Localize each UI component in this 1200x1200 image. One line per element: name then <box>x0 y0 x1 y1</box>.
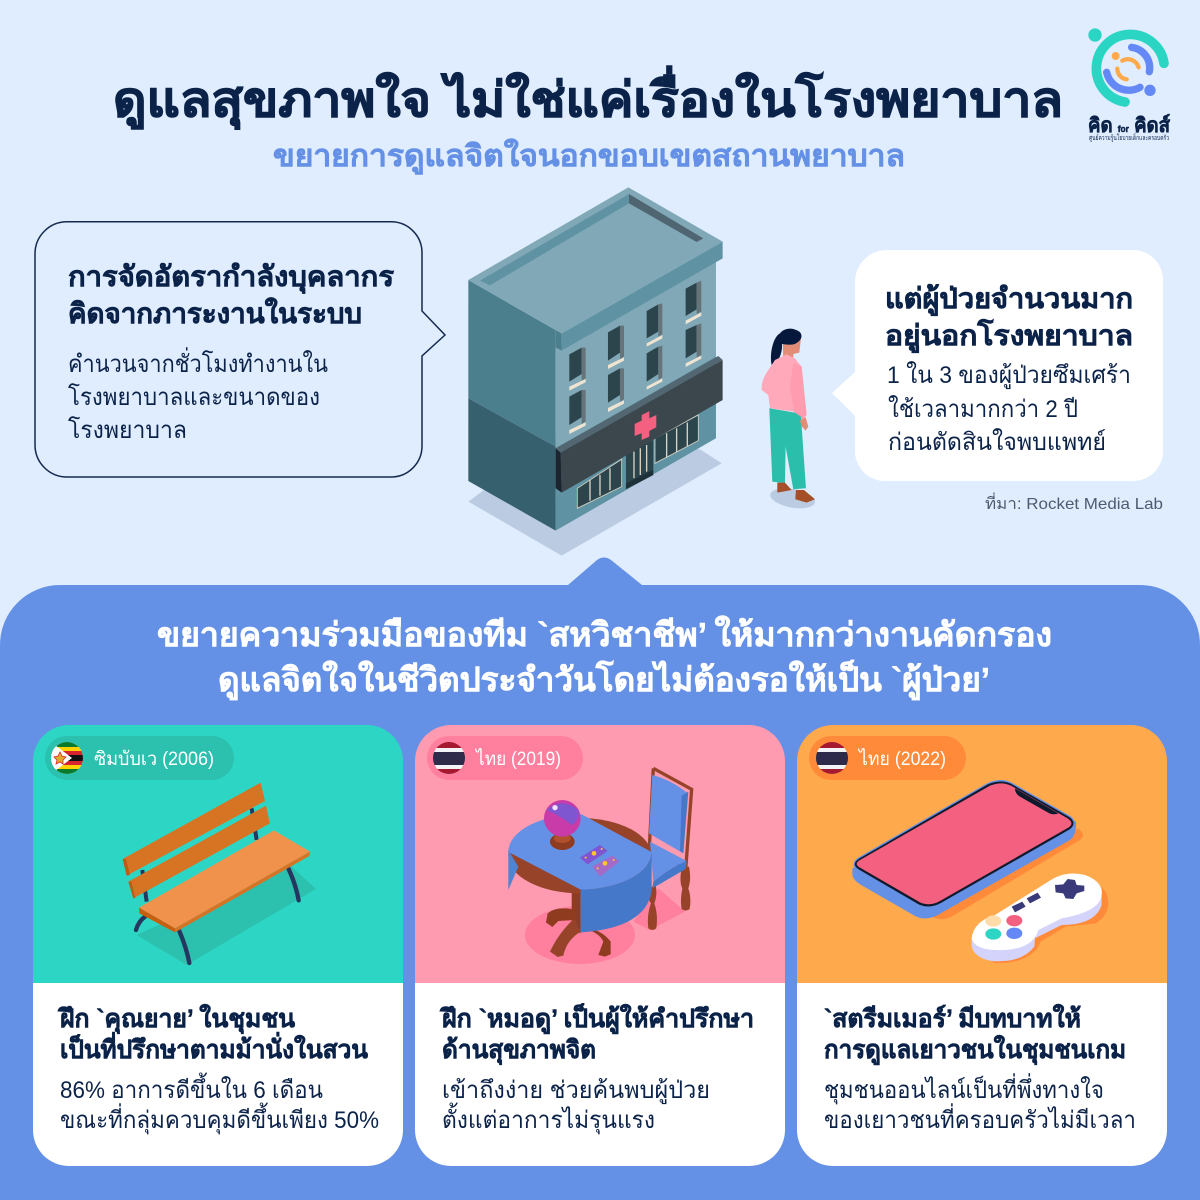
card: Thailand 2022 <box>797 725 1167 1166</box>
callout: staffing: คำนวนจากชั่วโมงทำงานใน <box>68 347 328 378</box>
callout: staffing <box>35 222 445 477</box>
card text: Zimbabwe <box>57 1003 379 1135</box>
source note: ที่มา: Rocket Media Lab <box>985 492 1163 513</box>
callout: staffing: โรงพยาบาล <box>68 416 187 444</box>
icon: smartphone and game controller <box>852 780 1108 963</box>
card: Thailand 2019 <box>415 725 785 1166</box>
panel heading: ขยายความร่วมมือของทีม `สหวิชาชีพ’ ให้มากกว่างานคัดกรอง <box>157 615 1052 653</box>
icon: woman standing <box>762 329 817 511</box>
country pill <box>809 736 966 780</box>
card text: Zimbabwe: 86% อาการดีขึ้นใน 6 เดือน <box>60 1072 323 1104</box>
card text: Thailand 2022: การดูแลเยาวชนในชุมชนเกม <box>824 1034 1126 1066</box>
country pill: ไทย (2022) <box>857 748 946 770</box>
card text: Thailand 2019: ตั้งแต่อาการไม่รุนแรง <box>442 1102 655 1135</box>
title: ดูแลสุขภาพใจ ไม่ใช่แค่เรื่องในโรงพยาบาล <box>113 65 1063 130</box>
logo <box>1088 28 1171 142</box>
country pill <box>45 736 234 780</box>
card: Zimbabwe <box>33 725 403 1166</box>
icon: Thai flag <box>433 742 465 774</box>
callout: patients outside hospital: 1 ใน 3 ของผู้ป่วยซึมเศร้า <box>887 361 1131 390</box>
card text: Zimbabwe: ขณะที่กลุ่มควบคุมดีขึ้นเพียง 50% <box>60 1102 379 1135</box>
country pill <box>427 736 583 780</box>
card text: Thailand 2019: เข้าถึงง่าย ช่วยค้นพบผู้ป่วย <box>442 1077 710 1105</box>
icon: Thai flag <box>816 742 848 774</box>
card text: Thailand 2022: ของเยาวชนที่ครอบครัวไม่มีเวลา <box>824 1103 1136 1134</box>
blue bottom panel <box>0 558 1200 1200</box>
subtitle: ขยายการดูแลจิตใจนอกขอบเขตสถานพยาบาล <box>273 138 905 175</box>
callout: staffing: การจัดอัตรากำลังบุคลากร <box>68 261 394 294</box>
card text: Zimbabwe: ฝึก `คุณยาย’ ในชุมชน <box>57 1003 295 1035</box>
callout: staffing: คิดจากภาระงานในระบบ <box>68 297 362 329</box>
callout: patients outside hospital <box>832 250 1163 481</box>
logo: คิด for คิดส์ <box>1088 114 1171 137</box>
icon: hospital building <box>468 187 723 556</box>
callout: patients outside hospital: ก่อนตัดสินใจพบแพทย์ <box>888 428 1106 456</box>
icon: park bench <box>123 783 316 965</box>
panel heading <box>157 615 1052 701</box>
card text: Thailand 2019 <box>439 1003 754 1135</box>
card text: Thailand 2019: ด้านสุขภาพจิต <box>442 1036 596 1066</box>
callout: patients outside hospital: ใช้เวลามากกว่า 2 ปี <box>888 395 1078 423</box>
callout: patients outside hospital: อยู่นอกโรงพยาบาล <box>885 318 1133 353</box>
icon: Zimbabwe flag <box>51 742 83 774</box>
chair back frame <box>649 768 692 870</box>
card text: Thailand 2022 <box>824 1003 1136 1134</box>
panel heading: ดูแลจิตใจในชีวิตประจำวันโดยไม่ต้องรอให้เป็น `ผู้ป่วย’ <box>218 659 990 701</box>
table pedestal and feet <box>572 888 581 933</box>
country pill: ซิมบับเว (2006) <box>94 749 214 770</box>
card text: Thailand 2019: ฝึก `หมอดู’ เป็นผู้ให้คำปรึกษา <box>439 1003 754 1035</box>
icon: fortune teller table and chair <box>508 768 692 964</box>
card text: Thailand 2022: `สตรีมเมอร์’ มีบทบาทให้ <box>824 1003 1081 1033</box>
card text: Zimbabwe: เป็นที่ปรึกษาตามม้านั่งในสวน <box>60 1032 368 1064</box>
logo: ศูนย์ความรู้นโยบายเด็กและครอบครัว <box>1089 133 1169 142</box>
callout: patients outside hospital: แต่ผู้ป่วยจำนวนมาก <box>885 283 1133 316</box>
card text: Thailand 2022: ชุมชนออนไลน์เป็นที่พึ่งทางใจ <box>824 1073 1104 1105</box>
callout: staffing: โรงพยาบาลและขนาดของ <box>68 383 320 411</box>
country pill: ไทย (2019) <box>474 748 561 770</box>
